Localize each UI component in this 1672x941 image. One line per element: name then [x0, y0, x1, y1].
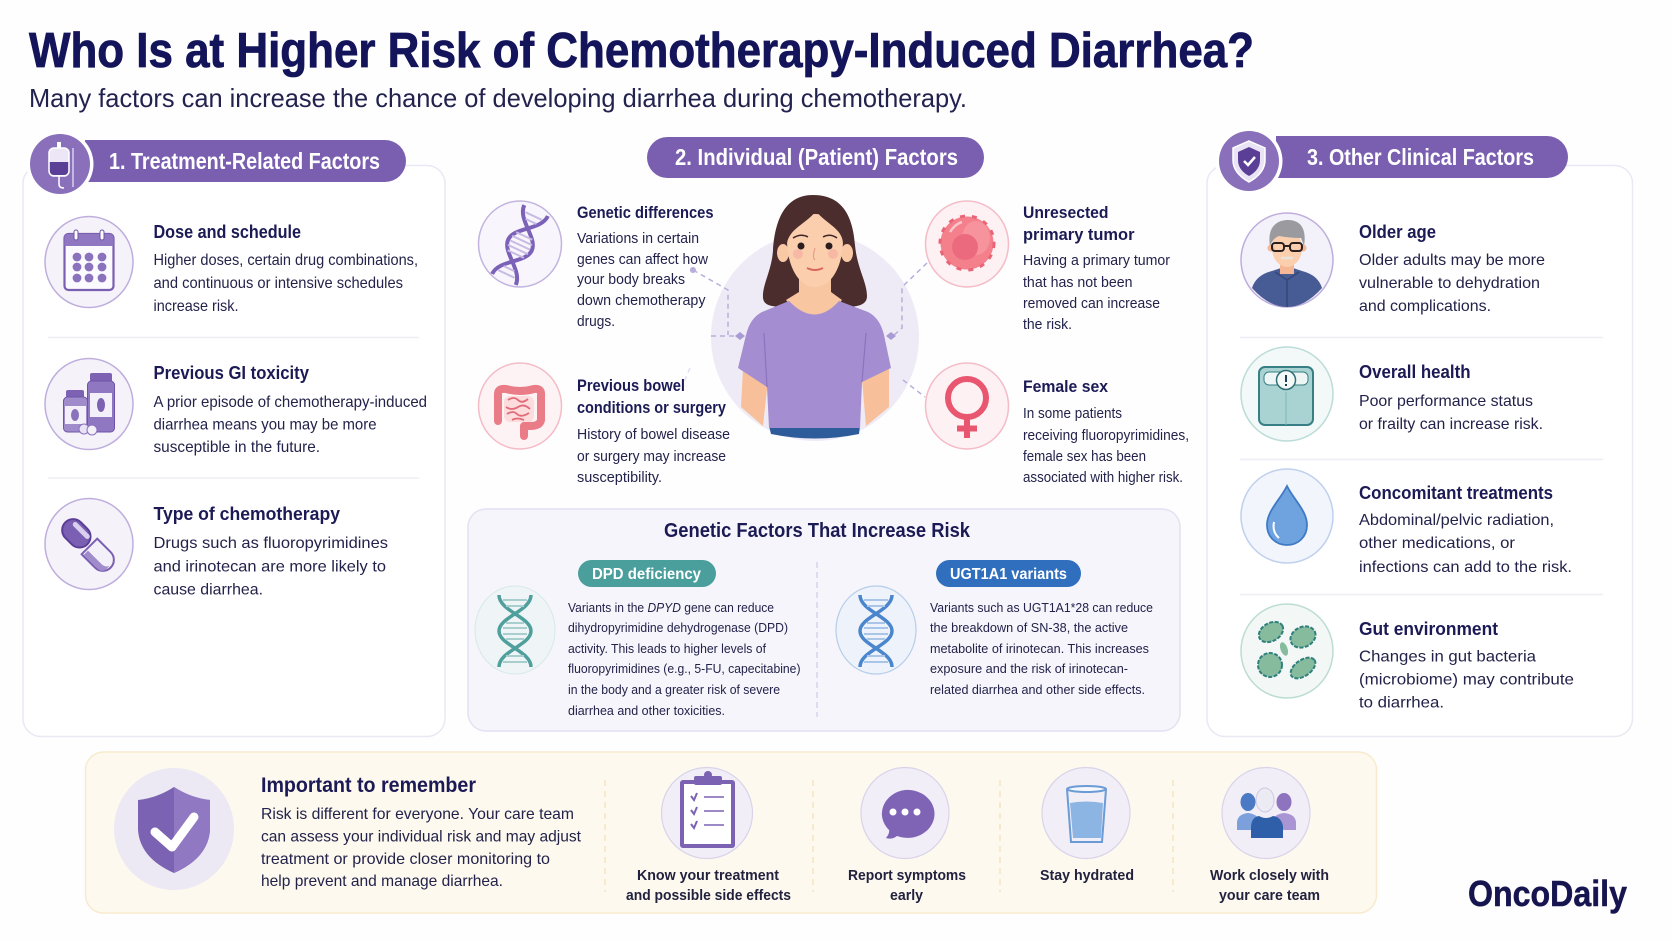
- jeans: [769, 426, 860, 438]
- icon: female symbol: [926, 363, 1008, 449]
- item: previous GI toxicity: [45, 358, 427, 456]
- tip: stay hydrated: [1040, 768, 1134, 884]
- hair: [763, 195, 867, 307]
- tip: report symptoms: early: [890, 887, 924, 904]
- section header: treatment-related factors: [26, 130, 406, 198]
- item: dose and schedule: Higher doses, certain drug combinations,: [154, 252, 418, 269]
- face: [787, 214, 843, 287]
- icon: chat bubble: [861, 768, 949, 858]
- item: unresected primary tumor: Unresected: [1023, 203, 1108, 222]
- column: UGT1A1 variants: [836, 560, 1153, 697]
- item: concomitant treatments: infections can add to the risk.: [1359, 559, 1572, 576]
- item: female sex: [926, 363, 1189, 486]
- illustration: person: [684, 195, 927, 441]
- item: previous GI toxicity: diarrhea means you may be more: [154, 416, 377, 434]
- item: older age: [1241, 213, 1545, 315]
- icon: water drop: [1241, 469, 1333, 563]
- text: important to remember: Risk is different for everyone. Your care team: [261, 806, 574, 823]
- item: female sex: female sex has been: [1023, 449, 1146, 465]
- tip: report symptoms: Report symptoms: [848, 867, 966, 884]
- icon: shield with check: [114, 768, 234, 890]
- item: unresected primary tumor: [926, 201, 1170, 333]
- item: genetic differences: your body breaks: [577, 272, 685, 288]
- text: important to remember: [261, 774, 582, 890]
- item: concomitant treatments: Abdominal/pelvic radiation,: [1359, 512, 1554, 529]
- icon: teal dna: [475, 586, 555, 674]
- column: DPD deficiency: diarrhea and other toxicities.: [568, 703, 725, 718]
- item: older age: and complications.: [1359, 298, 1491, 315]
- panel: genetic factors: [468, 509, 1180, 731]
- section header: other clinical factors: [1216, 128, 1568, 194]
- logo: OncoDaily: OncoDaily: [1468, 873, 1627, 914]
- column: DPD deficiency: in the body and a greater risk of severe: [568, 682, 780, 697]
- item: overall health: or frailty can increase risk.: [1359, 416, 1543, 433]
- item: genetic differences: drugs.: [577, 314, 615, 330]
- neck: [786, 276, 842, 318]
- arms: [741, 368, 768, 426]
- subtitle: Many factors can increase the chance of developing diarrhea during chemotherapy.: [29, 83, 967, 113]
- item: older age: vulnerable to dehydration: [1359, 275, 1540, 292]
- item: previous bowel conditions: conditions or surgery: [577, 398, 726, 417]
- connector lines: [684, 263, 927, 397]
- icon: blue dna: [836, 586, 916, 674]
- panel: important to remember: [86, 752, 1376, 913]
- item: female sex: receiving fluoropyrimidines,: [1023, 428, 1189, 444]
- item: previous bowel conditions: [478, 363, 730, 486]
- item: overall health: [1241, 347, 1543, 441]
- item: unresected primary tumor: removed can increase: [1023, 296, 1160, 312]
- item: dose and schedule: [45, 216, 418, 315]
- item: unresected primary tumor: primary tumor: [1023, 225, 1135, 244]
- column: UGT1A1 variants: metabolite of irinotecan. This increases: [930, 641, 1149, 656]
- icon: purple dna: [478, 201, 562, 287]
- panel: treatment-related factors: [23, 130, 445, 736]
- item: genetic differences: Variations in certain: [577, 231, 699, 247]
- item: gut environment: [1241, 604, 1574, 712]
- item: dose and schedule: Dose and schedule: [154, 222, 301, 242]
- tip: work with care team: [1210, 768, 1329, 904]
- tip: report symptoms: [848, 768, 966, 904]
- section header: other clinical factors: 3. Other Clinical Factors: [1307, 144, 1534, 170]
- item: type of chemotherapy: and irinotecan are more likely to: [154, 558, 386, 576]
- item: female sex: Female sex: [1023, 377, 1108, 396]
- item: type of chemotherapy: Drugs such as fluoropyrimidines: [154, 535, 388, 552]
- column: DPD deficiency: DPD deficiency: [592, 566, 701, 583]
- column: DPD deficiency: dihydropyrimidine dehydrogenase (DPD): [568, 620, 788, 635]
- item: dose and schedule: and continuous or intensive schedules: [154, 275, 403, 292]
- item: older age: Older age: [1359, 222, 1436, 242]
- item: previous GI toxicity: Previous GI toxicity: [154, 363, 309, 383]
- item: gut environment: (microbiome) may contribute: [1359, 672, 1574, 688]
- item: female sex: associated with higher risk.: [1023, 470, 1183, 486]
- icon: medicine bottles: [45, 358, 133, 450]
- item: concomitant treatments: Concomitant treatments: [1359, 483, 1553, 503]
- icon: capsule: [45, 498, 133, 590]
- item: type of chemotherapy: Type of chemotherapy: [154, 504, 340, 524]
- column: UGT1A1 variants: the breakdown of SN-38, the active: [930, 620, 1128, 635]
- item: previous bowel conditions: History of bowel disease: [577, 427, 730, 443]
- text: important to remember: help prevent and manage diarrhea.: [261, 873, 503, 890]
- item: previous bowel conditions: Previous bowel: [577, 376, 685, 395]
- tip: know your treatment: Know your treatment: [637, 867, 779, 884]
- shirt: [738, 301, 891, 428]
- item: previous bowel conditions: susceptibility.: [577, 470, 662, 486]
- item: gut environment: to diarrhea.: [1359, 694, 1444, 712]
- item: previous GI toxicity: susceptible in the future.: [154, 439, 320, 456]
- icon: calendar: [45, 216, 133, 308]
- tip: stay hydrated: Stay hydrated: [1040, 867, 1134, 884]
- icon: tumor cell: [926, 201, 1008, 287]
- panel: genetic factors: Genetic Factors That Increase Risk: [664, 520, 971, 542]
- tip: know your treatment: and possible side effects: [626, 887, 791, 904]
- item: genetic differences: Genetic differences: [577, 203, 714, 222]
- item: unresected primary tumor: that has not been: [1023, 275, 1132, 291]
- item: gut environment: Gut environment: [1359, 619, 1498, 639]
- icon: glass of water: [1042, 768, 1130, 858]
- column: UGT1A1 variants: exposure and the risk of irinotecan-: [930, 661, 1128, 676]
- item: overall health: Poor performance status: [1359, 393, 1533, 410]
- item: older age: Older adults may be more: [1359, 252, 1545, 269]
- column: DPD deficiency: Variants in the DPYD gene can reduce: [568, 600, 774, 615]
- column: UGT1A1 variants: UGT1A1 variants: [950, 566, 1067, 583]
- section header: individual patient factors: [647, 137, 984, 178]
- item: dose and schedule: increase risk.: [154, 298, 238, 315]
- ears: [777, 244, 789, 262]
- item: type of chemotherapy: cause diarrhea.: [154, 582, 263, 598]
- item: previous GI toxicity: A prior episode of chemotherapy-induced: [154, 394, 427, 411]
- item: genetic differences: [478, 201, 714, 330]
- text: important to remember: treatment or provide closer monitoring to: [261, 851, 550, 868]
- tip: work with care team: your care team: [1219, 887, 1320, 904]
- item: female sex: In some patients: [1023, 406, 1122, 422]
- item: overall health: Overall health: [1359, 362, 1470, 382]
- item: type of chemotherapy: [45, 498, 388, 598]
- title: Who Is at Higher Risk of Chemotherapy-Induced Diarrhea?: [29, 24, 1254, 78]
- item: concomitant treatments: other medications, or: [1359, 535, 1516, 552]
- icon: gut bacteria: [1241, 604, 1333, 698]
- item: unresected primary tumor: the risk.: [1023, 317, 1072, 333]
- text: important to remember: Important to remember: [261, 774, 476, 797]
- item: gut environment: Changes in gut bacteria: [1359, 648, 1536, 666]
- item: concomitant treatments: [1241, 469, 1572, 576]
- item: genetic differences: down chemotherapy: [577, 293, 706, 309]
- column: DPD deficiency: [475, 560, 800, 718]
- panel: other clinical factors: [1207, 128, 1632, 736]
- icon: clipboard: [662, 768, 752, 858]
- text: important to remember: can assess your individual risk and may adjust: [261, 828, 582, 846]
- section header: treatment-related factors: 1. Treatment-Related Factors: [109, 148, 380, 174]
- tip: know your treatment: [626, 768, 791, 904]
- column: DPD deficiency: activity. This leads to higher levels of: [568, 641, 766, 656]
- icon: intestines: [478, 363, 562, 449]
- icon: older man: [1241, 213, 1333, 307]
- icon: care team: [1222, 768, 1310, 858]
- item: unresected primary tumor: Having a primary tumor: [1023, 253, 1170, 269]
- tip: work with care team: Work closely with: [1210, 867, 1329, 884]
- icon: weighing scale: [1241, 347, 1333, 441]
- column: DPD deficiency: fluoropyrimidines (e.g., 5-FU, capecitabine): [568, 661, 800, 676]
- column: UGT1A1 variants: related diarrhea and other side effects.: [930, 682, 1145, 697]
- item: genetic differences: genes can affect how: [577, 252, 708, 268]
- item: previous bowel conditions: or surgery may increase: [577, 449, 726, 465]
- section header: individual patient factors: 2. Individual (Patient) Factors: [675, 144, 958, 170]
- column: UGT1A1 variants: Variants such as UGT1A1*28 can reduce: [930, 600, 1153, 615]
